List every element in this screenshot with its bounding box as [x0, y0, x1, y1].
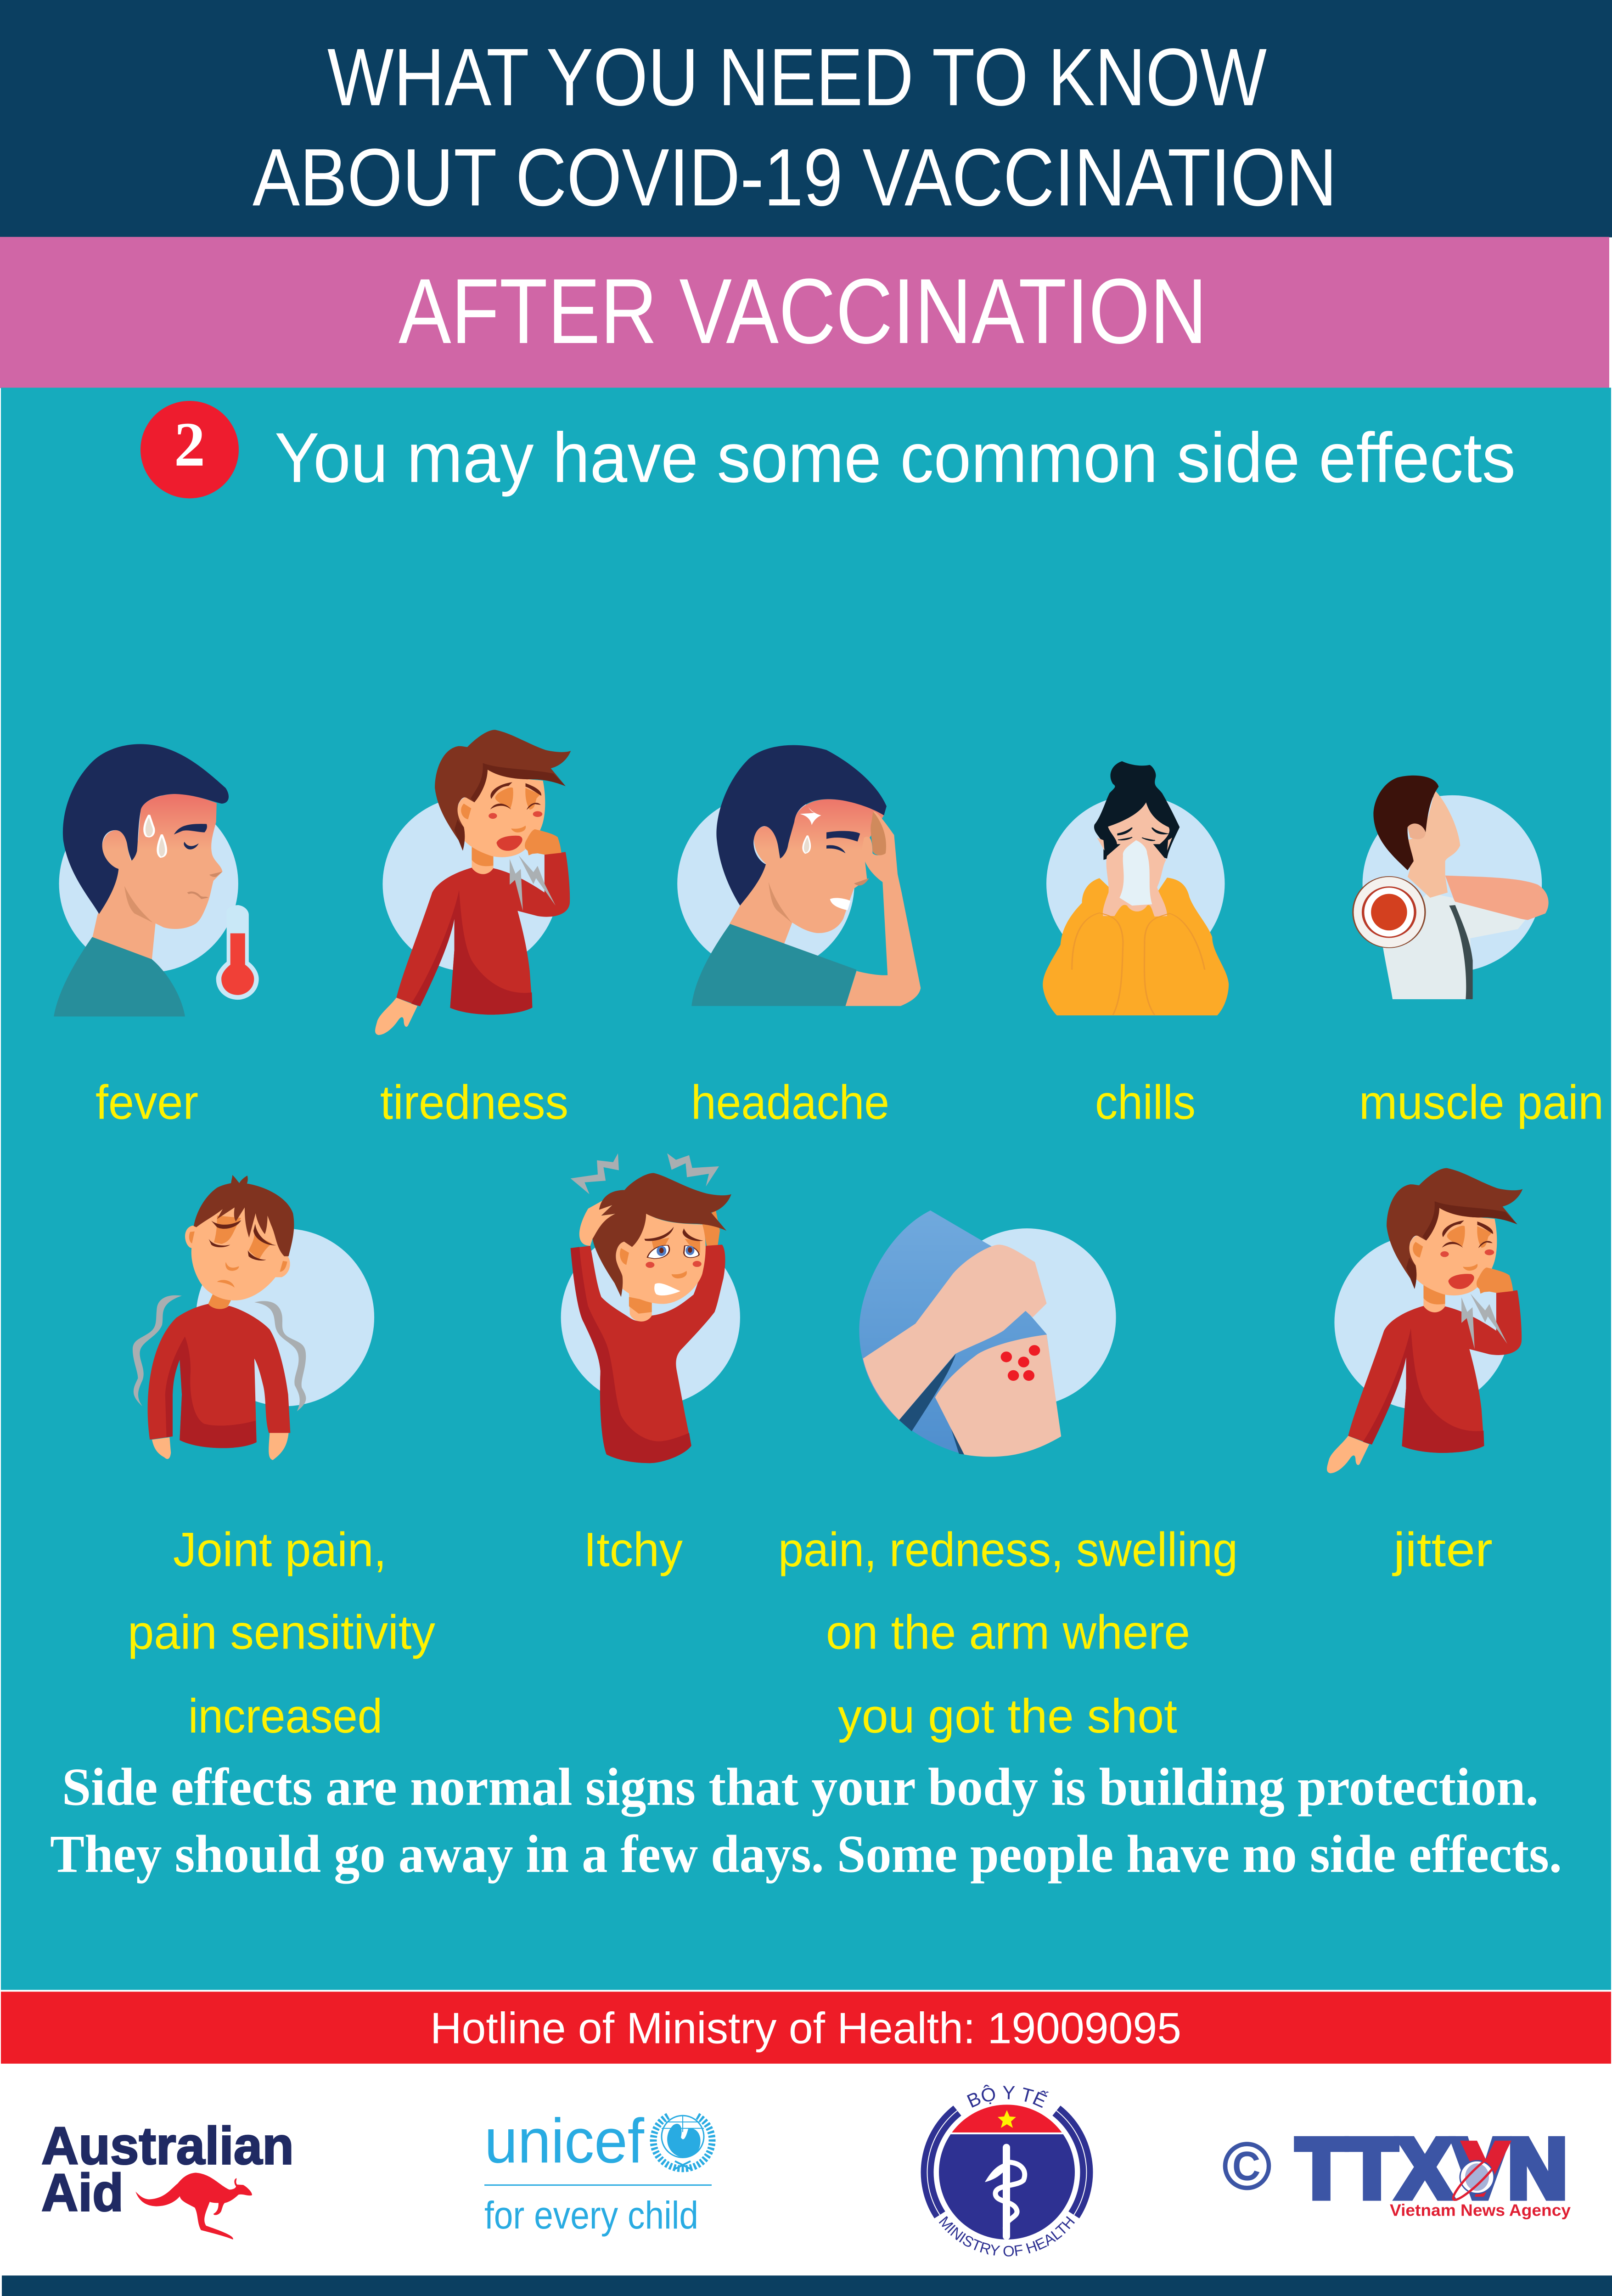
label: joint pain: increased [188, 1689, 382, 1743]
hotline bar [1, 1992, 1611, 2064]
icon: jitter [1327, 1168, 1522, 1473]
label: joint pain: pain sensitivity [128, 1605, 435, 1659]
label: chills: chills [1095, 1075, 1196, 1129]
label: pain, redness, swelling: you got the shot [838, 1689, 1177, 1743]
step number badge [140, 401, 239, 498]
label: pain, redness, swelling: on the arm where [826, 1605, 1190, 1659]
icon: fever [54, 744, 259, 1017]
explanatory note: They should go away in a few days. Some people have no side effects. [50, 1825, 1562, 1884]
step number badge: 2 [174, 409, 205, 479]
label: pain, redness, swelling: pain, redness, swelling [778, 1523, 1238, 1577]
section band: after vaccination [0, 237, 1609, 388]
logo: unicef [484, 2106, 712, 2237]
icon: globe [1449, 2149, 1505, 2204]
logo: copyright TTXVN: Vietnam News Agency [1390, 2201, 1571, 2219]
section heading: AFTER VACCINATION [399, 259, 1207, 363]
subheading: You may have some common side effects [275, 418, 1516, 497]
icon: headache [677, 745, 921, 1006]
logo: copyright TTXVN: © [1223, 2128, 1271, 2203]
header banner [0, 0, 1612, 237]
label: jitter: jitter [1392, 1523, 1493, 1577]
label: joint pain [128, 1523, 435, 1743]
logo: Ministry of Health [927, 2082, 1086, 2260]
explanatory note: Side effects are normal signs that your body is building protection. [62, 1758, 1539, 1817]
logo: unicef: for every child [484, 2193, 698, 2237]
label: itchy: Itchy [584, 1523, 683, 1577]
footer bar [2, 2275, 1612, 2296]
hotline text: Hotline of Ministry of Health: 19009095 [430, 2004, 1181, 2053]
logo: Australian Aid: Aid [41, 2163, 124, 2222]
title: WHAT YOU NEED TO KNOW [327, 32, 1267, 123]
icon: kangaroo [135, 2172, 252, 2240]
icon: itchy [561, 1154, 740, 1463]
label: pain, redness, swelling [778, 1523, 1238, 1743]
explanatory note [50, 1758, 1562, 1884]
title: ABOUT COVID-19 VACCINATION [253, 132, 1337, 223]
icon: unicef emblem [653, 2116, 712, 2169]
icon: joint pain [133, 1175, 374, 1460]
icon: chills [1043, 761, 1229, 1015]
logo: Australian Aid [41, 2116, 294, 2240]
logo: Australian Aid: Australian [41, 2116, 294, 2175]
label: headache: headache [691, 1075, 889, 1129]
icon: arm rash [859, 1210, 1116, 1457]
label: joint pain: Joint pain, [173, 1523, 387, 1577]
icon: tiredness [375, 730, 571, 1035]
logo: Ministry of Health: BỘ Y TẾ [964, 2082, 1050, 2112]
label: fever: fever [95, 1075, 198, 1129]
logo: Ministry of Health: MINISTRY OF HEALTH [936, 2213, 1078, 2260]
label: muscle pain: muscle pain [1359, 1075, 1604, 1129]
title [253, 32, 1337, 223]
logo: unicef: unicef [484, 2106, 645, 2176]
main teal panel [1, 388, 1611, 1990]
logo: copyright TTXVN: TTXVN [1296, 2121, 1567, 2216]
icon: star [998, 2110, 1016, 2128]
label: tiredness: tiredness [380, 1075, 568, 1129]
icon: rod of Asclepius [985, 2144, 1025, 2240]
icon: muscle pain [1353, 776, 1549, 999]
